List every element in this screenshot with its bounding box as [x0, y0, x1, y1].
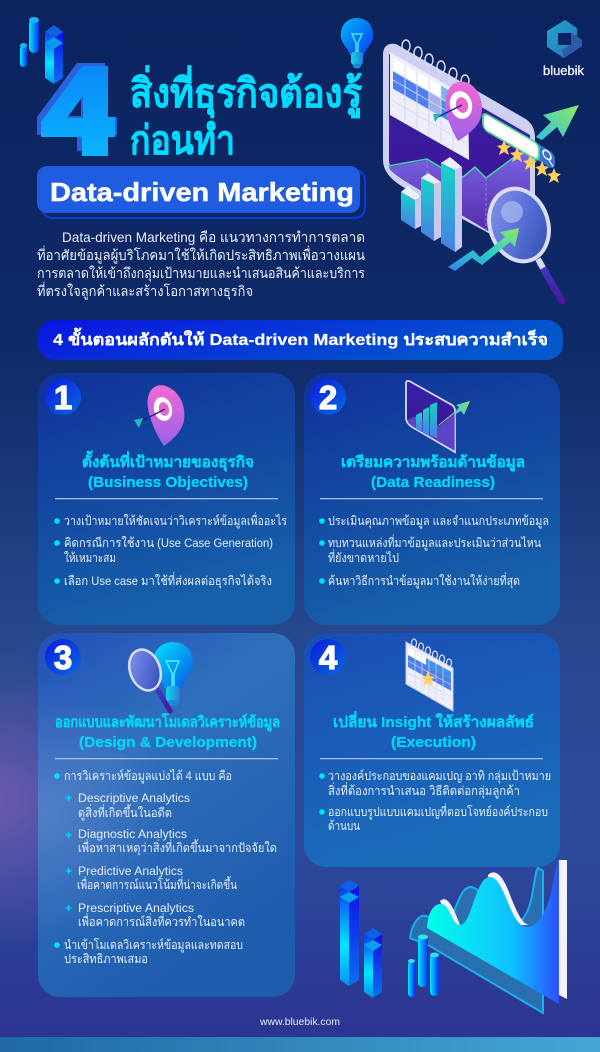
- bullets: [54, 512, 287, 589]
- list: Prescriptive Analytics: [78, 901, 194, 915]
- list: ดูสิ่งที่เกิดขึ้นในอดีต: [78, 804, 172, 821]
- title text: สิ่งที่ธุรกิจต้องรู้: [130, 65, 362, 119]
- list: การวิเคราะห์ข้อมูลแบ่งได้ 4 แบบ คือ: [64, 769, 232, 784]
- steps heading pill: 4 ขั้นตอนผลักดันให้ Data-driven Marketing ประสบความสำเร็จ: [53, 327, 548, 349]
- heading: (Execution): [391, 734, 476, 751]
- pin: [445, 81, 482, 141]
- magnifier: [540, 263, 562, 301]
- up arrow: [536, 105, 579, 140]
- calendar: [390, 52, 469, 160]
- logo: bluebik: [543, 20, 584, 78]
- list: นำเข้าโมเดลวิเคราะห์ข้อมูลและทดสอบ: [64, 937, 243, 953]
- title text: ก่อนทำ: [130, 119, 235, 163]
- icon: light bulb: [341, 18, 373, 68]
- panel: step 1: [38, 373, 295, 625]
- number 2: 2: [319, 379, 337, 416]
- title pill: Data-driven Marketing: [37, 166, 365, 218]
- search bar: [483, 112, 555, 171]
- number 1: [45, 379, 81, 416]
- list: +: [65, 791, 72, 805]
- heading: [55, 712, 280, 751]
- title number 4: [37, 63, 117, 156]
- heading: ออกแบบและพัฒนาโมเดลวิเคราะห์ข้อมูล: [55, 712, 280, 732]
- list: +: [65, 828, 72, 842]
- lower arrow: [448, 228, 519, 271]
- bullets: คิดกรณีการใช้งาน (Use Case Generation): [64, 536, 273, 550]
- bullets: เลือก Use case มาใช้ที่ส่งผลต่อธุรกิจได้จริง: [64, 572, 272, 589]
- icon: calendar: [406, 639, 453, 711]
- stars: [497, 140, 561, 183]
- heading: (Business Objectives): [88, 474, 248, 491]
- icon: chart board: [406, 381, 470, 452]
- panel: step 4: [304, 633, 560, 867]
- list: [54, 769, 277, 966]
- title text: [130, 65, 362, 163]
- intro paragraph: [37, 229, 365, 300]
- number 4: 4: [319, 639, 338, 676]
- bullets: [319, 769, 551, 833]
- list: Descriptive Analytics: [78, 791, 190, 805]
- hero illustration: [383, 40, 579, 301]
- heading: (Data Readiness): [371, 474, 495, 491]
- rings: [402, 40, 469, 87]
- heading: [82, 450, 254, 491]
- number 1: 1: [54, 379, 72, 416]
- number 2: [310, 379, 346, 416]
- icon: top-left isometric bars: [20, 17, 63, 84]
- number 3: [45, 639, 81, 676]
- heading: เตรียมความพร้อมด้านข้อมูล: [341, 454, 525, 472]
- list: ประสิทธิภาพเสมอ: [64, 952, 148, 966]
- number 4: [310, 639, 346, 676]
- number 3: 3: [54, 639, 72, 676]
- illustration: bottom-right charts: [340, 860, 567, 1013]
- list: +: [65, 901, 72, 915]
- list: เพื่อคาดการณ์แนวโน้มที่น่าจะเกิดขึ้น: [77, 876, 237, 892]
- heading: เปลี่ยน Insight ให้สร้างผลลัพธ์: [333, 711, 534, 731]
- list: Diagnostic Analytics: [78, 827, 187, 841]
- list: +: [65, 864, 72, 878]
- title pill: Data-driven Marketing: Data-driven Marketing: [50, 177, 354, 207]
- intro paragraph: ที่ตรงใจลูกค้าและสร้างโอกาสทางธุรกิจ: [37, 282, 253, 300]
- bullets: ออกแบบรูปแบบแคมเปญที่ตอบโจทย์องค์ประกอบ: [328, 803, 548, 820]
- panel: step 2: [304, 373, 560, 625]
- icon: target pin: [134, 385, 184, 446]
- heading: [333, 711, 534, 751]
- bullets: สิ่งที่ต้องการนำเสนอ วิธีติดต่อกลุ่มลูกค้า: [328, 782, 520, 799]
- bars: [401, 192, 415, 229]
- rear layer: [410, 868, 543, 1013]
- bullets: ค้นหาวิธีการนำข้อมูลมาใช้งานให้ง่ายที่สุด: [328, 572, 520, 589]
- bullets: ให้เหมาะสม: [64, 551, 116, 565]
- bullets: ประเมินคุณภาพข้อมูล และจำแนกประเภทข้อมูล: [328, 514, 549, 529]
- bullets: วางองค์ประกอบของแคมเปญ อาทิ กลุ่มเป้าหมาย: [328, 769, 551, 784]
- bullets: วางเป้าหมายให้ชัดเจนว่าวิเคราะห์ข้อมูลเพื่ออะไร: [64, 512, 287, 529]
- list: Predictive Analytics: [78, 864, 183, 878]
- footer url: www.bluebik.com: [259, 1016, 340, 1028]
- intro paragraph: ที่อาศัยข้อมูลผู้บริโภคมาใช้ให้เกิดประสิทธิภาพเพื่อวางแผน: [37, 246, 365, 264]
- list: เพื่อคาดการณ์สิ่งที่ควรทำในอนาคต: [78, 913, 245, 929]
- front wave: [427, 860, 559, 1004]
- logo: bluebik: bluebik: [543, 63, 584, 78]
- back white sheet: [440, 860, 567, 999]
- bullets: ด้านบน: [328, 819, 360, 833]
- frame: [383, 44, 535, 258]
- steps heading pill: [38, 320, 563, 360]
- panel: step 3: [38, 633, 295, 997]
- heading: (Design & Development): [79, 734, 257, 751]
- bullets: ที่ยังขาดหายไป: [328, 549, 399, 565]
- heading: [341, 454, 525, 491]
- bullets: [319, 514, 549, 589]
- list: เพื่อหาสาเหตุว่าสิ่งที่เกิดขึ้นมาจากปัจจัยใด: [78, 839, 277, 856]
- intro paragraph: การตลาดให้เข้าถึงกลุ่มเป้าหมายและนำเสนอสินค้าและบริการ: [37, 265, 365, 282]
- icon: bulb and magnifier: [124, 642, 193, 711]
- bullets: ทบทวนแหล่งที่มาข้อมูลและประเมินว่าส่วนไหน: [328, 534, 542, 551]
- intro paragraph: Data-driven Marketing คือ แนวทางการทำการตลาด: [62, 229, 365, 245]
- heading: ตั้งต้นที่เป้าหมายของธุรกิจ: [82, 450, 254, 472]
